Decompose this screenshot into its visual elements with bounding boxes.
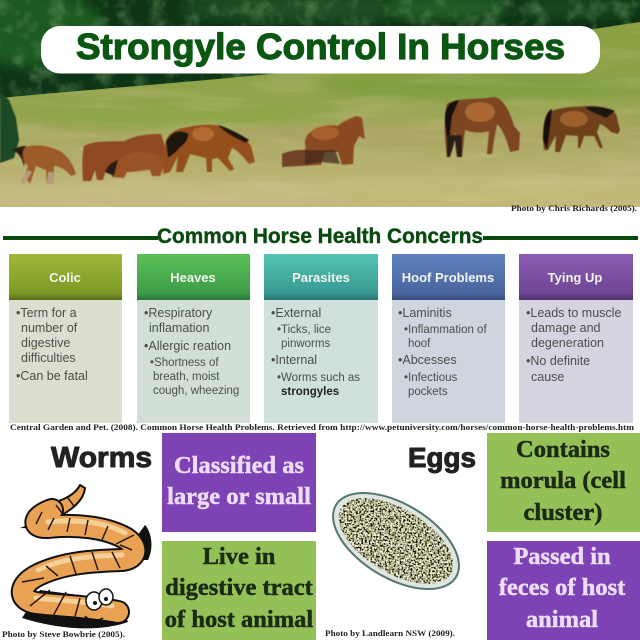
heaves list: •Shortness of	[150, 357, 219, 369]
title banner: Strongyle Control In Horses	[76, 26, 565, 67]
panel: colic	[9, 254, 122, 423]
parasites list: •Ticks, lice	[277, 324, 331, 336]
colic list: difficulties	[21, 351, 76, 365]
box: classified as large or small	[162, 433, 316, 532]
box: live in digestive tract: digestive tract	[165, 574, 314, 601]
box: contains morula: Contains	[516, 436, 610, 463]
photo credit: egg: Photo by Landlearn NSW (2009).	[325, 628, 455, 638]
panel: heaves	[137, 254, 250, 423]
hoof list: •Inflammation of	[404, 324, 487, 336]
panel: hoof problems	[392, 254, 505, 423]
colic list: digestive	[21, 336, 70, 350]
colic list: •Term for a	[16, 306, 77, 320]
hoof list: hoof	[408, 338, 431, 350]
small foal in middle	[282, 149, 318, 167]
panel: hoof problems: Hoof Problems	[402, 270, 494, 285]
box: passed in feces: Passed in	[513, 543, 611, 570]
panel: parasites	[264, 254, 378, 423]
small evergreen tree	[0, 92, 19, 163]
heading: worms: Worms	[51, 442, 152, 474]
box: contains morula: morula (cell	[500, 467, 626, 494]
tying up list: degeneration	[531, 336, 604, 350]
box: passed in feces: animal	[526, 606, 598, 633]
walking horse	[543, 106, 620, 152]
tying up list: damage and	[531, 321, 601, 335]
panel: tying up	[519, 254, 633, 423]
photo credit: worm: Photo by Steve Bowbrie (2005).	[2, 629, 125, 639]
hoof list: pockets	[408, 386, 448, 398]
box: passed in feces	[487, 541, 640, 640]
panel: colic: Colic	[49, 270, 81, 285]
box: contains morula: cluster)	[524, 499, 602, 526]
heaves list: inflamation	[149, 321, 209, 335]
illustration: cartoon worm	[20, 485, 151, 628]
worm tail	[42, 485, 85, 517]
parasites list: strongyles	[281, 386, 339, 398]
tying up list: •No definite	[526, 354, 590, 368]
grazing horse	[445, 97, 520, 157]
pasture	[0, 20, 640, 207]
heaves list: breath, moist	[153, 371, 220, 383]
panel: heaves: Heaves	[170, 270, 216, 285]
panel: parasites: Parasites	[292, 270, 350, 285]
box: contains morula	[487, 433, 640, 532]
section heading: common horse health concerns: Common Horse Health Concerns	[157, 225, 483, 248]
heading: eggs: Eggs	[408, 442, 476, 473]
box: live in digestive tract: Live in	[203, 543, 276, 570]
colic list: •Can be fatal	[16, 369, 88, 383]
hoof list: •Infectious	[404, 372, 457, 384]
heaves list: cough, wheezing	[153, 385, 239, 397]
heaves list: •Respiratory	[144, 306, 213, 320]
worm eyes	[85, 589, 113, 620]
parasites list: •Internal	[271, 353, 317, 367]
heaves list: •Allergic reation	[144, 339, 231, 353]
box: classified as large or small: large or small	[167, 483, 311, 510]
tying up list: •Leads to muscle	[526, 306, 621, 320]
hoof list: •Abcesses	[398, 353, 457, 367]
box: live in digestive tract: of host animal	[165, 606, 313, 633]
box: passed in feces: feces of host	[499, 574, 626, 601]
colic list: number of	[21, 321, 78, 335]
parasites list: •External	[271, 306, 321, 320]
box: live in digestive tract	[162, 541, 316, 640]
pair of horses	[305, 116, 365, 165]
forest backdrop	[0, 0, 640, 98]
parasites list: •Worms such as	[277, 372, 360, 384]
parasites list: pinworms	[281, 338, 330, 350]
photo credit: pasture: Photo by Chris Richards (2005).	[511, 203, 637, 213]
tying up list: cause	[531, 370, 564, 384]
large horse	[163, 125, 255, 174]
box: classified as large or small: Classified as	[174, 452, 304, 479]
mare and foal group	[82, 134, 166, 181]
illustration: strongyle egg	[332, 492, 460, 590]
section heading: common horse health concerns	[3, 225, 638, 248]
panel: tying up: Tying Up	[548, 270, 602, 285]
citation: Central Garden and Pet. (2008). Common Horse Health Problems. Retrieved from http://www.petuniversity.com/horses/common-horse-health-problems.htm	[10, 422, 634, 432]
photo: horses grazing in a pasture	[0, 0, 640, 207]
hoof list: •Laminitis	[398, 306, 452, 320]
foal at left	[12, 145, 76, 184]
